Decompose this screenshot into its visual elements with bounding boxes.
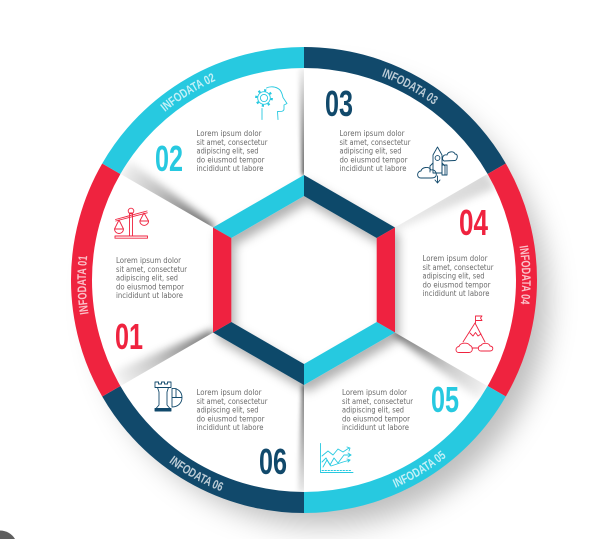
corner blob [0,530,15,539]
icon: line chart [320,444,353,472]
text block 05 [342,388,414,432]
number 02: 02 [155,138,183,179]
ring label 05: INFODATA 05 [392,450,446,488]
ring label 06: INFODATA 06 [169,456,224,491]
text block 03: do eiusmod tempor [340,155,408,164]
text block 03: sit amet, consectetur [340,138,411,147]
panel: 02 [155,73,288,179]
text block 05: sit amet, consectetur [342,397,414,406]
text block 06: Lorem ipsum dolor [196,388,262,397]
number 04: 04 [459,202,488,243]
text block 05: Lorem ipsum dolor [342,388,408,397]
text block 06: adipiscing elit, sed [196,406,258,415]
text block 04: adipiscing elit, sed [422,272,484,281]
text block 06: incididunt ut labore [196,423,264,432]
ring label 02: INFODATA 02 [160,73,216,112]
text block 05: incididunt ut labore [342,423,409,432]
text block 06: do eiusmod tempor [196,414,265,423]
text block 03 [340,129,411,173]
panel: 04 [422,202,531,353]
text block 02: Lorem ipsum dolor [196,129,262,138]
number 05: 05 [431,379,459,420]
text block 02: incididunt ut labore [196,164,264,173]
number 06: 06 [259,441,287,482]
panel: 03 [325,68,458,184]
sector fold shadows [112,68,496,492]
disc drop shadow [96,74,548,526]
icon: rocket and clouds [418,147,457,183]
text block 03: adipiscing elit, sed [340,147,402,156]
text block 01: sit amet, consectetur [116,265,188,274]
ring label 03: INFODATA 03 [382,68,438,104]
text block 04: Lorem ipsum dolor [422,254,488,263]
central hexagon ring [213,175,395,385]
text block 04: incididunt ut labore [422,289,490,298]
text block 06 [196,388,268,432]
text block 04 [422,254,494,298]
ring label 01: INFODATA 01 [77,256,88,314]
text block 03: Lorem ipsum dolor [340,129,405,138]
text block 01: do eiusmod tempor [116,282,185,291]
icon: scales [114,208,149,238]
number 01: 01 [115,316,143,357]
icon: head with gear [256,87,287,120]
text block 01: Lorem ipsum dolor [116,256,182,265]
text block 04: sit amet, consectetur [422,263,494,272]
panel: 05 [320,379,459,488]
text block 05: do eiusmod tempor [342,414,411,423]
text block 03: incididunt ut labore [340,164,407,173]
text block 02: adipiscing elit, sed [196,147,258,156]
text block 02: do eiusmod tempor [196,155,265,164]
text block 05: adipiscing elit, sed [342,406,404,415]
text block 02 [196,129,268,173]
outer segmented ring [81,57,527,502]
ring label 04: INFODATA 04 [520,246,531,304]
text block 02: sit amet, consectetur [196,138,268,147]
panel: 01 [77,208,188,357]
icon: mountain with flag [456,316,493,352]
text block 01 [116,256,188,300]
white disc [72,48,536,512]
text block 04: do eiusmod tempor [422,280,491,289]
text block 06: sit amet, consectetur [196,397,268,406]
icon: chess rook and shield [155,382,182,411]
panel: 06 [154,382,287,491]
text block 01: incididunt ut labore [116,291,183,300]
text block 01: adipiscing elit, sed [116,274,178,283]
number 03: 03 [325,83,353,124]
